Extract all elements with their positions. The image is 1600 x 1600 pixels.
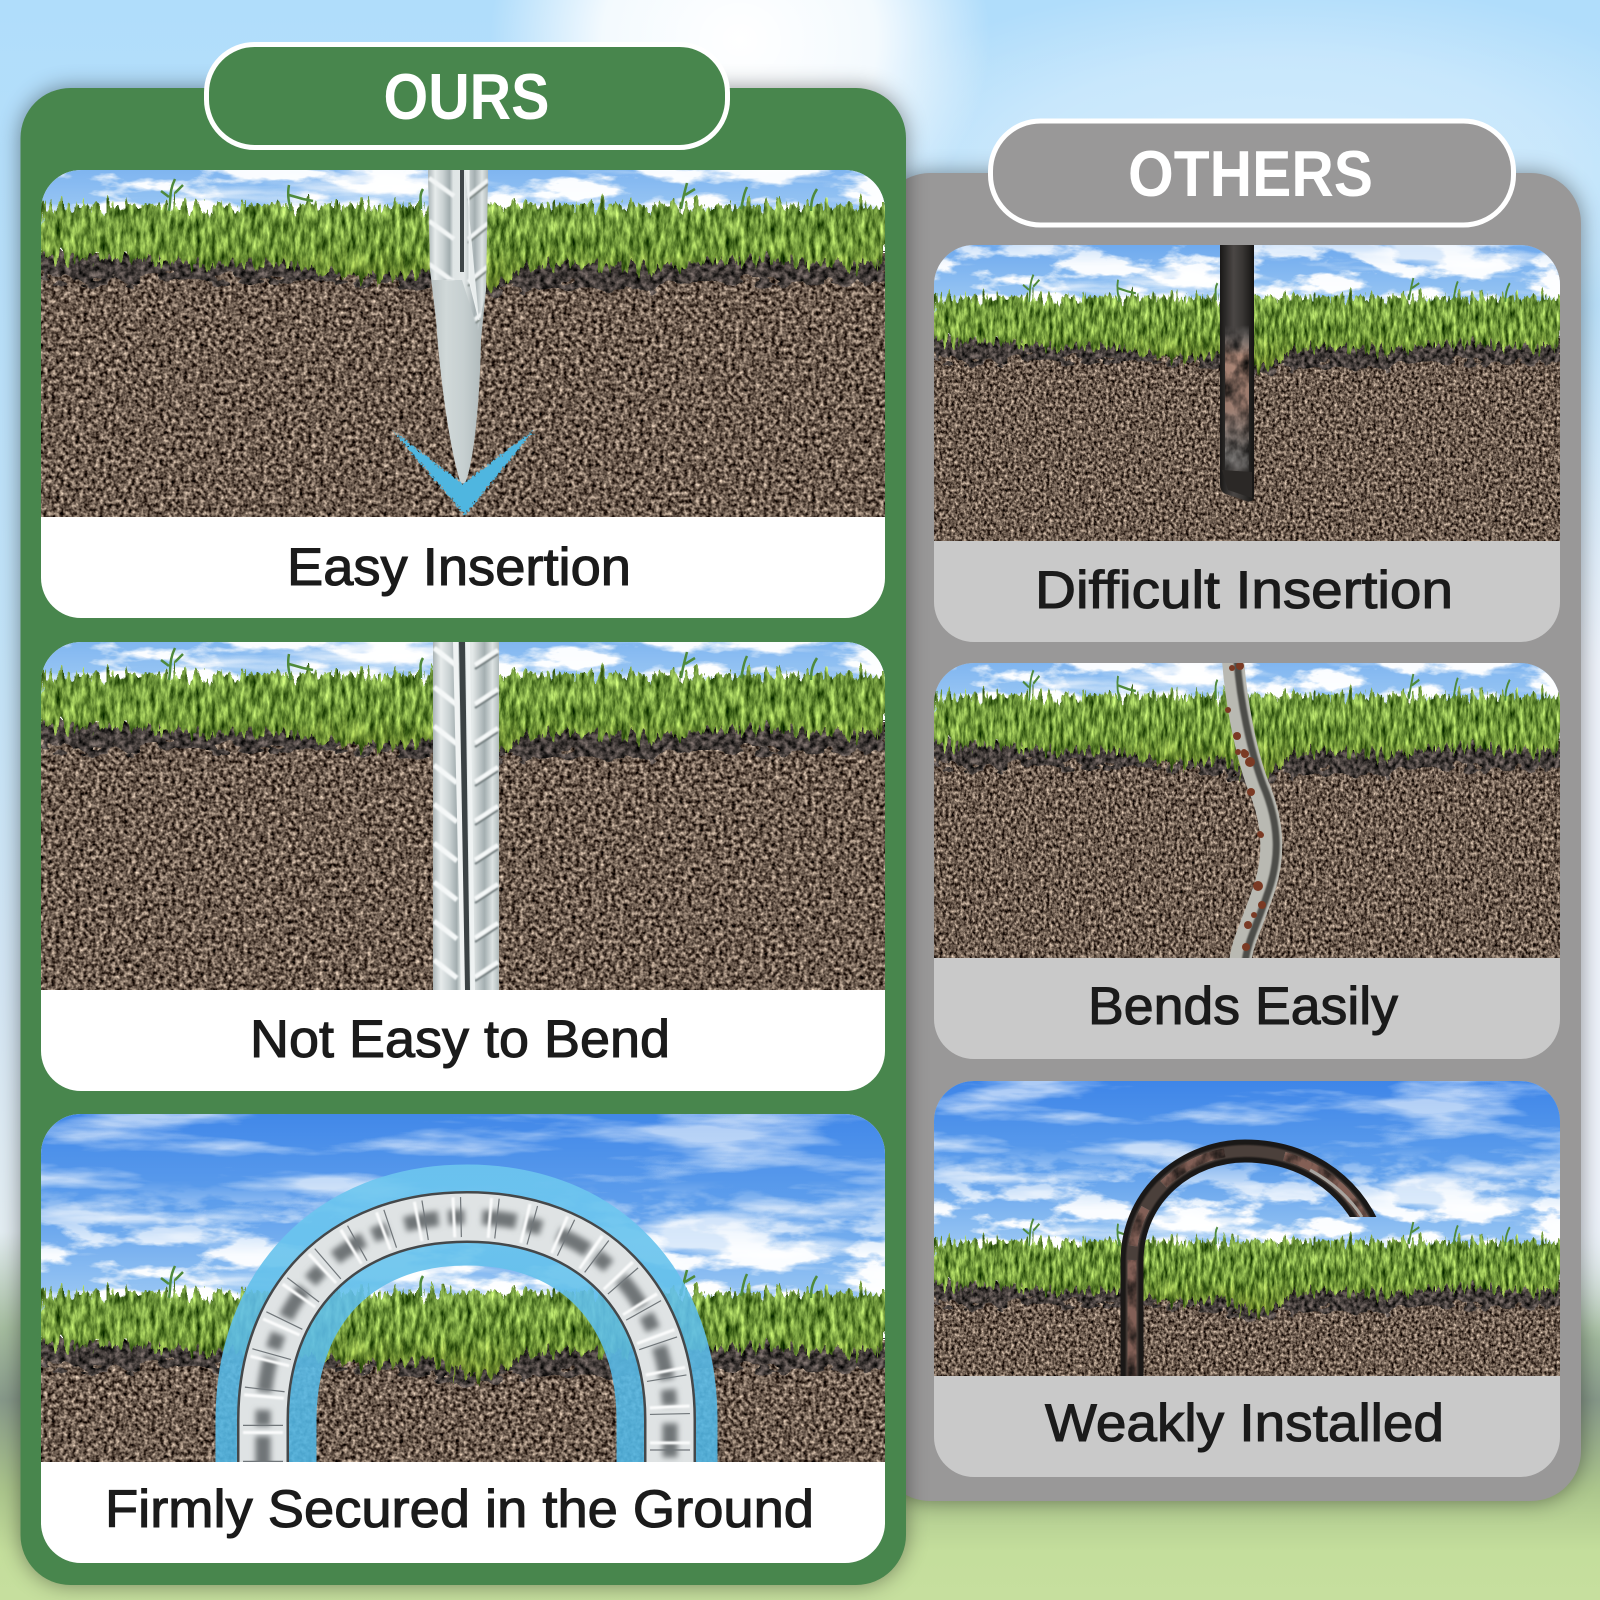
card: not easy to bend <box>41 642 885 1091</box>
label: weakly installed: Weakly Installed <box>1045 1394 1444 1453</box>
others heading pill <box>990 121 1514 225</box>
label: firmly secured in the ground: Firmly Secured in the Ground <box>105 1480 814 1539</box>
card: firmly secured in the ground <box>41 1090 885 1563</box>
panel: others <box>880 121 1581 1501</box>
others panel background <box>880 173 1581 1501</box>
label: not easy to bend: Not Easy to Bend <box>250 1010 670 1069</box>
card: difficult insertion <box>934 245 1560 642</box>
scene: soil and grass with U-shaped stake <box>41 1090 885 1470</box>
ours heading pill <box>206 44 728 148</box>
label: bends easily: Bends Easily <box>1088 977 1398 1036</box>
icon: blue downward chevron <box>393 430 534 515</box>
icon: galvanized U stake <box>263 1217 670 1470</box>
scene: soil and grass with dull rod <box>934 245 1560 541</box>
scene: soil and grass with ribbed stake <box>41 642 885 990</box>
label: difficult insertion: Difficult Insertion <box>1035 561 1453 620</box>
icon: blue glow arch <box>266 1215 667 1470</box>
icon: straight ribbed stake <box>433 642 499 990</box>
panel: ours <box>20 3 906 1585</box>
card: bends easily <box>934 663 1560 1059</box>
card: easy insertion <box>41 170 885 618</box>
ours heading pill: OURS <box>384 60 550 133</box>
icon: pointed ribbed stake <box>428 170 488 484</box>
label: easy insertion: Easy Insertion <box>287 538 631 597</box>
card: weakly installed <box>934 1069 1560 1477</box>
scene: soil and grass with hooked rod <box>934 1069 1560 1380</box>
ours panel background <box>20 88 906 1585</box>
scene: soil and grass with pointed stake <box>41 170 885 517</box>
scene: soil and grass with bent rod <box>934 663 1560 958</box>
others heading pill: OTHERS <box>1128 137 1373 210</box>
